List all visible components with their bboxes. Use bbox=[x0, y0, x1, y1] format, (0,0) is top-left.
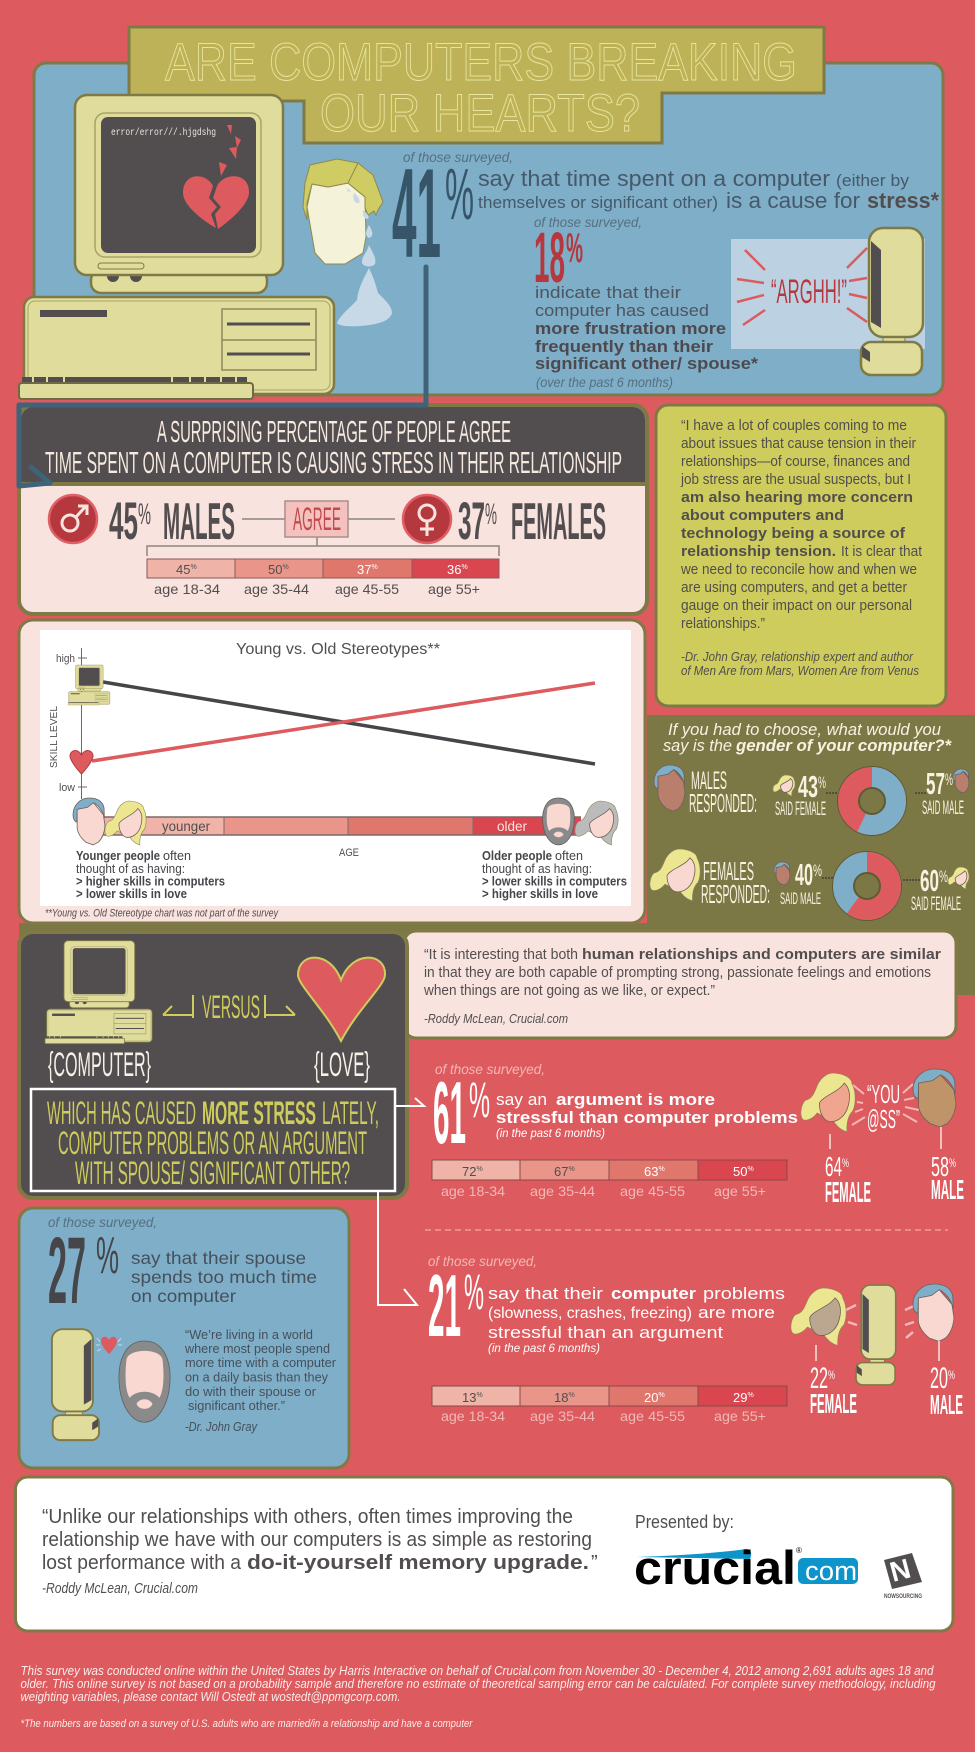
bar: agree by age: age 18-34 bbox=[154, 581, 220, 597]
quote: -Roddy McLean, Crucial.com bbox=[42, 1580, 198, 1597]
text: older people: thought of as having: bbox=[482, 862, 592, 876]
agree box bbox=[147, 501, 499, 556]
panel: Dr. John Gray quote: It is clear that bbox=[841, 544, 922, 560]
panel: Dr. John Gray quote: we need to reconcile how and when we bbox=[680, 562, 917, 578]
panel: Dr. John Gray quote: about issues that cause tension in their bbox=[681, 436, 916, 452]
bar: 21 percent by age: age 55+ bbox=[714, 1408, 766, 1424]
callout: ARGHH monitor: “ARGHH!” bbox=[771, 273, 847, 311]
quote: relationship we have with our computers is as simple as restoring bbox=[42, 1529, 592, 1551]
males responded bbox=[654, 765, 969, 836]
stat: 18 percent: indicate that their bbox=[535, 284, 682, 302]
heading bbox=[45, 414, 622, 480]
bar: 61 percent by age: age 55+ bbox=[714, 1183, 766, 1199]
icon: large computer with broken heart: error/error///.hjgdshg bbox=[111, 127, 216, 139]
heading bbox=[663, 720, 952, 755]
males responded: RESPONDED: bbox=[689, 788, 757, 818]
panel: 27 percent spouse: of those surveyed, bbox=[48, 1214, 157, 1230]
panel: Dr. John Gray quote: -Dr. John Gray, relationship expert and author bbox=[681, 649, 914, 664]
bar: agree by age: 36 bbox=[447, 562, 461, 577]
question box: WITH SPOUSE/ SIGNIFICANT OTHER? bbox=[75, 1155, 350, 1191]
text: older people: Older people bbox=[482, 849, 552, 863]
icon: couple with monitor: 20 bbox=[930, 1362, 948, 1395]
stat: 21 percent bbox=[428, 1253, 785, 1355]
stat: 61 percent: of those surveyed, bbox=[435, 1061, 545, 1077]
bar: 61 percent by age: age 45-55 bbox=[620, 1183, 685, 1199]
panel: computer versus love: {COMPUTER} bbox=[48, 1046, 151, 1084]
text: younger people: Younger people bbox=[76, 849, 160, 863]
quote: “Unlike our relationships with others, often times improving the bbox=[42, 1506, 573, 1528]
icon: arguing couple: @SS” bbox=[867, 1104, 900, 1134]
bar: 61 percent by age: % bbox=[476, 1166, 483, 1173]
question box: MORE STRESS bbox=[202, 1095, 316, 1131]
icon: mini heart bbox=[70, 751, 93, 774]
stat: 18 percent: of those surveyed, bbox=[534, 214, 642, 230]
chart axis: SKILL LEVEL bbox=[48, 706, 60, 768]
icon: arguing couple: “YOU bbox=[867, 1079, 900, 1109]
stat: males 45 percent bbox=[109, 492, 235, 551]
panel: young vs old stereotypes bbox=[19, 620, 645, 923]
bar: agree by age: 37 bbox=[357, 562, 371, 577]
bar: 21 percent by age: 20 bbox=[644, 1390, 658, 1405]
panel: Dr. John Gray quote: relationships.” bbox=[681, 616, 765, 632]
icon: couple with monitor: % bbox=[828, 1368, 835, 1382]
logo: crucial.com: crucial bbox=[634, 1541, 796, 1594]
arrow: connector from 41 percent to relationship panel bbox=[19, 267, 426, 486]
males responded: % bbox=[818, 773, 826, 792]
bar: 61 percent by age: % bbox=[747, 1166, 754, 1173]
logo: crucial.com: ® bbox=[796, 1546, 802, 1555]
bar: 21 percent by age: 13 bbox=[462, 1390, 476, 1405]
quote: do with their spouse or bbox=[185, 1384, 317, 1399]
icon: young couple bbox=[73, 798, 146, 845]
bar: 21 percent by age bbox=[432, 1386, 787, 1424]
stat: 18 percent: significant other/ spouse* bbox=[535, 355, 759, 373]
panel: gender of your computer bbox=[650, 720, 969, 921]
panel: Dr. John Gray quote: relationships—of course, finances and bbox=[681, 454, 910, 470]
title banner: OUR HEARTS? bbox=[320, 84, 640, 143]
panel: survey agree bbox=[19, 405, 647, 614]
stat: 41 percent: is a cause for bbox=[726, 188, 860, 213]
quote: significant other.” bbox=[188, 1398, 285, 1413]
arrow: to 61 percent bbox=[395, 1098, 424, 1106]
panel: Dr. John Gray quote: am also hearing more concern bbox=[681, 490, 913, 506]
panel: closing quote and logos bbox=[16, 1477, 953, 1631]
logo: nowsourcing: NOWSOURCING bbox=[884, 1594, 922, 1600]
panel: survey agree: MALES bbox=[163, 493, 235, 551]
quote: do-it-yourself memory upgrade. bbox=[247, 1552, 589, 1574]
stat: 21 percent: % bbox=[464, 1264, 484, 1320]
chart axis bbox=[48, 648, 87, 799]
bar: 61 percent by age: 72 bbox=[462, 1164, 476, 1179]
stat: 18 percent: frequently than their bbox=[535, 338, 714, 356]
panel: 27 percent spouse: on computer bbox=[131, 1286, 236, 1306]
quote: where most people spend bbox=[184, 1341, 330, 1356]
bar: agree by age: % bbox=[461, 564, 468, 571]
bar: 21 percent by age: 18 bbox=[554, 1390, 568, 1405]
stat: 41 percent bbox=[392, 142, 939, 284]
bar: 21 percent by age: % bbox=[476, 1392, 483, 1399]
bar: 21 percent by age: age 35-44 bbox=[530, 1408, 595, 1424]
question box: LATELY, bbox=[322, 1095, 379, 1131]
panel: computer versus love: {LOVE} bbox=[314, 1046, 370, 1084]
panel: Dr. John Gray quote: of Men Are from Mars, Women Are from Venus bbox=[681, 663, 919, 678]
stat: 61 percent: (in the past 6 months) bbox=[496, 1126, 605, 1140]
bar: 21 percent by age: age 18-34 bbox=[441, 1408, 505, 1424]
icon: couple with monitor: % bbox=[948, 1368, 955, 1382]
bar: agree by age: age 55+ bbox=[428, 581, 480, 597]
bar: agree by age: age 45-55 bbox=[335, 581, 399, 597]
bar: 21 percent by age: 29 bbox=[733, 1390, 747, 1405]
age bar: older bbox=[497, 818, 527, 834]
bar: 21 percent by age: % bbox=[658, 1392, 665, 1399]
text: older people: > lower skills in computers bbox=[482, 874, 627, 888]
text: younger people: thought of as having: bbox=[76, 862, 185, 876]
icon: crying face bbox=[303, 159, 392, 326]
stat: 18 percent: 18 bbox=[534, 219, 565, 298]
quote: “We’re living in a world bbox=[185, 1327, 313, 1342]
quote: lost performance with a bbox=[42, 1552, 242, 1574]
icon: mini computer bbox=[68, 665, 110, 705]
icon: heart bbox=[298, 958, 385, 1041]
logo: crucial.com: com bbox=[805, 1556, 857, 1586]
panel: Roddy McLean quote: in that they are both capable of prompting strong, passionate feelings and emotions bbox=[424, 965, 931, 981]
males responded: % bbox=[945, 770, 953, 789]
bar: 61 percent by age: % bbox=[658, 1166, 665, 1173]
females responded: FEMALES bbox=[703, 856, 754, 886]
stat: 21 percent: computer bbox=[611, 1284, 696, 1303]
axis label: age: AGE bbox=[339, 847, 359, 859]
females responded: % bbox=[939, 867, 948, 886]
bar: 21 percent by age: age 45-55 bbox=[620, 1408, 685, 1424]
icon: older couple bbox=[543, 798, 618, 845]
icon: couple with monitor bbox=[791, 1284, 963, 1420]
logo: crucial.com bbox=[634, 1541, 858, 1594]
panel: 27 percent spouse: spends too much time bbox=[131, 1267, 317, 1287]
panel: olive gender band bbox=[19, 715, 975, 995]
stat: 21 percent: say that their bbox=[488, 1284, 603, 1303]
bar: 21 percent by age: % bbox=[747, 1392, 754, 1399]
bar: 61 percent by age bbox=[432, 1160, 787, 1199]
icon: couple with monitor: FEMALE bbox=[810, 1388, 857, 1419]
panel: Dr. John Gray quote: gauge on their impact on our personal bbox=[681, 598, 912, 614]
stat: 18 percent: more frustration more bbox=[535, 320, 726, 338]
panel: Roddy McLean quote: when things are not going as we like, or expect.” bbox=[423, 983, 715, 999]
stat: 18 percent: (over the past 6 months) bbox=[536, 374, 673, 390]
panel: Roddy McLean quote: -Roddy McLean, Crucial.com bbox=[424, 1011, 568, 1026]
bar: 61 percent by age: age 18-34 bbox=[441, 1183, 505, 1199]
icon: arguing couple: FEMALE bbox=[825, 1177, 871, 1209]
stat: females 37 percent bbox=[458, 492, 606, 551]
females responded: SAID MALE bbox=[780, 889, 821, 908]
logo: nowsourcing: N bbox=[887, 1553, 914, 1588]
title banner bbox=[129, 27, 824, 143]
text: younger people bbox=[76, 849, 225, 901]
panel: 27 percent spouse: say that their spouse bbox=[131, 1248, 306, 1268]
bar: 61 percent by age: age 35-44 bbox=[530, 1183, 595, 1199]
icon: arguing couple: % bbox=[842, 1156, 849, 1170]
stat: males 45 percent: % bbox=[138, 498, 151, 531]
panel: top blue stress panel bbox=[34, 63, 943, 395]
females responded: RESPONDED: bbox=[701, 879, 770, 909]
icon: female symbol bbox=[403, 495, 451, 543]
quote: on a daily basis than they bbox=[185, 1370, 328, 1384]
bar: agree by age: % bbox=[282, 564, 289, 571]
females responded: % bbox=[813, 861, 822, 880]
heading: gender of your computer?* bbox=[735, 736, 952, 755]
chart axis: low bbox=[59, 782, 75, 794]
stat: 18 percent: computer has caused bbox=[535, 302, 709, 320]
text: survey methodology: *The numbers are based on a survey of U.S. adults who are married/in a relationship and have a computer bbox=[20, 1718, 474, 1730]
text: survey methodology bbox=[20, 1663, 936, 1730]
stat: males 45 percent: 45 bbox=[109, 492, 138, 551]
stat: females 37 percent: % bbox=[485, 498, 497, 531]
bar: 61 percent by age: 63 bbox=[644, 1164, 658, 1179]
panel: 27 percent spouse bbox=[19, 1208, 349, 1468]
stat: 21 percent: problems bbox=[703, 1284, 785, 1303]
logo: nowsourcing bbox=[884, 1553, 922, 1600]
icon: monitor, heart, older man bbox=[52, 1329, 170, 1440]
text: younger people: often bbox=[163, 849, 191, 863]
stat: 61 percent: stressful than computer problems bbox=[496, 1108, 798, 1127]
stat: 21 percent: are more bbox=[698, 1303, 775, 1322]
bar: agree by age bbox=[147, 559, 499, 597]
panel: Dr. John Gray quote: job stress are the usual suspects, but I bbox=[680, 472, 911, 488]
stat: 21 percent: of those surveyed, bbox=[428, 1253, 537, 1269]
quote bbox=[42, 1506, 598, 1597]
bar: agree by age: % bbox=[371, 564, 378, 571]
bar: 61 percent by age: 67 bbox=[554, 1164, 568, 1179]
text: older people: > higher skills in love bbox=[482, 887, 598, 901]
stat: 21 percent: (slowness, crashes, freezing) bbox=[488, 1305, 692, 1322]
chart title: Young vs. Old Stereotypes** bbox=[236, 641, 440, 658]
females responded: 60 bbox=[920, 863, 939, 898]
versus label bbox=[163, 989, 295, 1025]
heading: If you had to choose, what would you bbox=[668, 720, 942, 739]
panel: computer versus love bbox=[19, 932, 407, 1198]
bar: agree by age: age 35-44 bbox=[244, 581, 309, 597]
text: survey methodology: weighting variables, please contact Will Ostedt at wostedt@ppmgcorp.com. bbox=[20, 1689, 400, 1704]
icon: arguing couple bbox=[801, 1069, 964, 1209]
bar: 21 percent by age: % bbox=[568, 1392, 575, 1399]
stat: 41 percent: stress* bbox=[867, 188, 939, 213]
stat: 18 percent: % bbox=[566, 224, 583, 271]
age bar bbox=[100, 817, 581, 835]
stat: 18 percent bbox=[534, 214, 759, 390]
stat: 21 percent: stressful than an argument bbox=[488, 1323, 723, 1342]
stat: 21 percent: (in the past 6 months) bbox=[488, 1341, 600, 1355]
text: younger people: > higher skills in computers bbox=[76, 874, 225, 888]
stat: 61 percent: % bbox=[469, 1072, 490, 1128]
icon: arguing couple: % bbox=[949, 1156, 956, 1170]
stat: 41 percent: of those surveyed, bbox=[403, 149, 513, 165]
panel: Roddy McLean quote: human relationships and computers are similar bbox=[582, 947, 941, 963]
stat: 61 percent: argument is more bbox=[556, 1090, 715, 1109]
females responded: 40 bbox=[795, 857, 813, 892]
question box: COMPUTER PROBLEMS OR AN ARGUMENT bbox=[58, 1125, 367, 1161]
footnote: **Young vs. Old Stereotype chart was not part of the survey bbox=[45, 908, 279, 920]
icon: arguing couple: 58 bbox=[931, 1151, 949, 1182]
agree box: AGREE bbox=[293, 501, 341, 537]
chart axis: high bbox=[56, 653, 75, 665]
quote bbox=[184, 1327, 337, 1434]
chart lines bbox=[92, 682, 595, 764]
stat: 61 percent: 61 bbox=[433, 1063, 466, 1162]
panel: Dr. John Gray quote: about computers and bbox=[681, 508, 844, 524]
panel: Roddy McLean quote bbox=[404, 931, 956, 1038]
stat: 41 percent: (either by bbox=[836, 171, 910, 190]
stat: 21 percent: 21 bbox=[428, 1256, 461, 1355]
males responded: MALES bbox=[691, 767, 727, 795]
bar: agree by age: 45 bbox=[176, 562, 190, 577]
title banner: ARE COMPUTERS BREAKING bbox=[165, 33, 797, 92]
panel: Dr. John Gray quote: “I have a lot of couples coming to me bbox=[681, 418, 907, 434]
panel: 27 percent spouse: 27 bbox=[48, 1218, 86, 1324]
stat: 41 percent: % bbox=[445, 155, 474, 235]
question box bbox=[31, 1089, 395, 1191]
panel: Roddy McLean quote: “It is interesting that both bbox=[424, 947, 578, 963]
arrow: to 21 percent bbox=[378, 1191, 417, 1305]
icon: computer bbox=[45, 941, 152, 1044]
bar: 61 percent by age: 50 bbox=[733, 1164, 747, 1179]
callout: ARGHH monitor bbox=[731, 228, 925, 375]
stat: 41 percent: 41 bbox=[392, 142, 441, 284]
icon: large computer with broken heart bbox=[19, 95, 334, 399]
panel: Dr. John Gray quote: technology being a source of bbox=[681, 526, 905, 542]
panel: 27 percent spouse: % bbox=[96, 1227, 119, 1285]
males responded: 43 bbox=[798, 769, 818, 804]
text: older people: often bbox=[555, 849, 583, 863]
icon: male symbol bbox=[49, 495, 97, 543]
stat: 41 percent: say that time spent on a computer bbox=[478, 166, 830, 191]
heading: A SURPRISING PERCENTAGE OF PEOPLE AGREE bbox=[157, 414, 511, 449]
presented by: Presented by: bbox=[635, 1512, 734, 1532]
males responded: SAID FEMALE bbox=[775, 799, 826, 820]
text: younger people: > lower skills in love bbox=[76, 887, 187, 901]
panel: Dr. John Gray quote: relationship tension. bbox=[681, 544, 836, 560]
versus label: VERSUS bbox=[202, 989, 260, 1025]
males responded: 57 bbox=[926, 766, 945, 801]
quote: -Dr. John Gray bbox=[185, 1420, 258, 1434]
stat: 61 percent: say an bbox=[496, 1090, 547, 1109]
bar: agree by age: % bbox=[190, 564, 197, 571]
bar: agree by age: 50 bbox=[268, 562, 282, 577]
bar: 61 percent by age: % bbox=[568, 1166, 575, 1173]
icon: arguing couple: 64 bbox=[825, 1151, 842, 1182]
stat: females 37 percent: 37 bbox=[458, 492, 485, 551]
stat: 41 percent: themselves or significant other) bbox=[478, 193, 718, 212]
heading: say is the bbox=[663, 736, 732, 755]
stat: 61 percent bbox=[433, 1061, 798, 1162]
quote: ” bbox=[591, 1552, 598, 1574]
panel: survey agree: FEMALES bbox=[511, 493, 606, 551]
icon: couple with monitor: 22 bbox=[810, 1362, 828, 1395]
females responded bbox=[650, 849, 969, 921]
quote: more time with a computer bbox=[185, 1355, 337, 1370]
question box: WHICH HAS CAUSED bbox=[47, 1095, 196, 1131]
age bar: younger bbox=[162, 818, 210, 834]
text: older people bbox=[482, 849, 627, 901]
panel: Dr. John Gray quote bbox=[656, 405, 946, 706]
panel: Dr. John Gray quote: are using computers, and get a better bbox=[681, 580, 907, 596]
